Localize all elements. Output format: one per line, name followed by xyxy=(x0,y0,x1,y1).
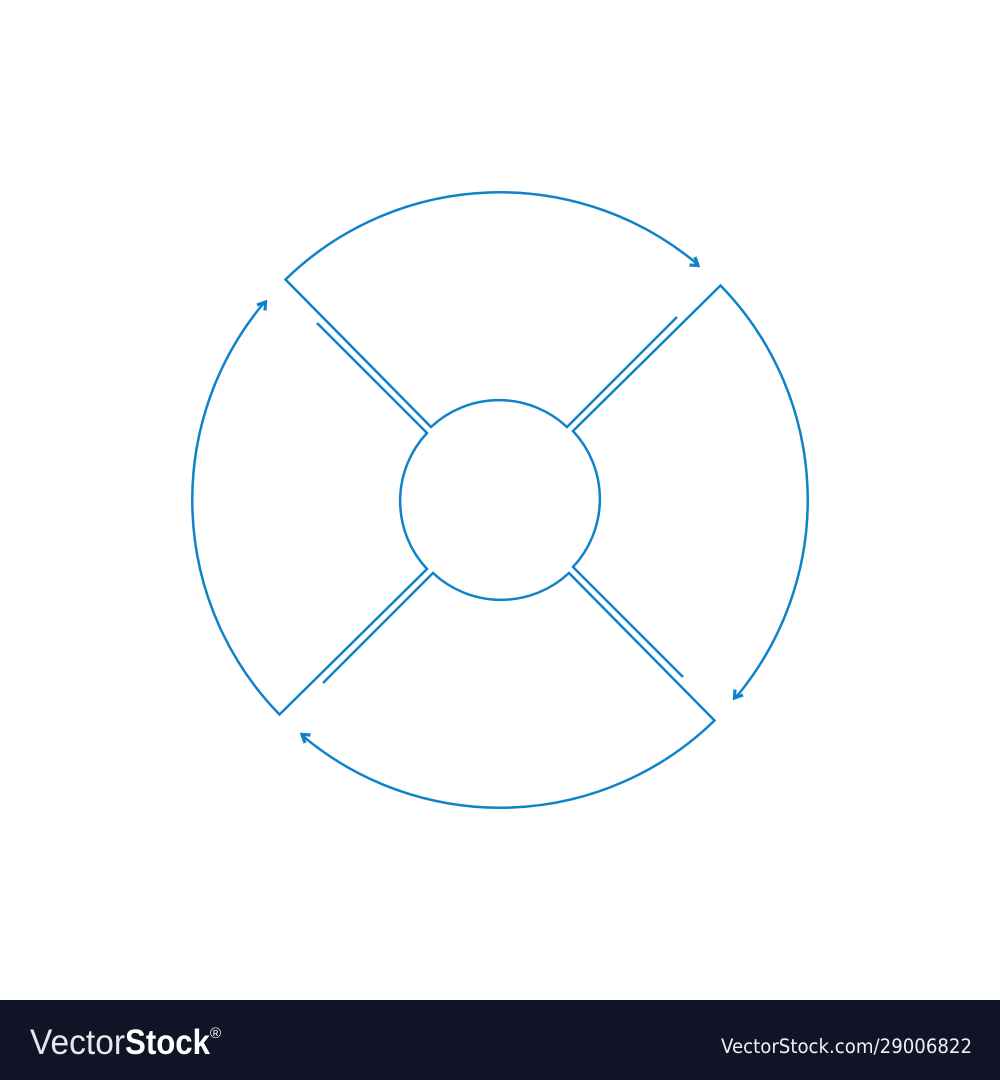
segment: right with arrow xyxy=(573,286,808,698)
footer bar xyxy=(0,1000,1000,1080)
logo: VectorStock: ® xyxy=(210,1025,221,1042)
segment: bottom with arrow xyxy=(302,573,714,808)
logo: VectorStock: Stock xyxy=(125,1023,210,1062)
cycle diagram xyxy=(192,192,808,808)
logo: VectorStock: Vector xyxy=(30,1023,125,1062)
segment: left with arrow xyxy=(192,302,427,714)
image id text: VectorStock.com/29006822 xyxy=(721,1035,972,1058)
logo: VectorStock xyxy=(30,1023,221,1062)
segment: top with arrow xyxy=(286,192,698,427)
